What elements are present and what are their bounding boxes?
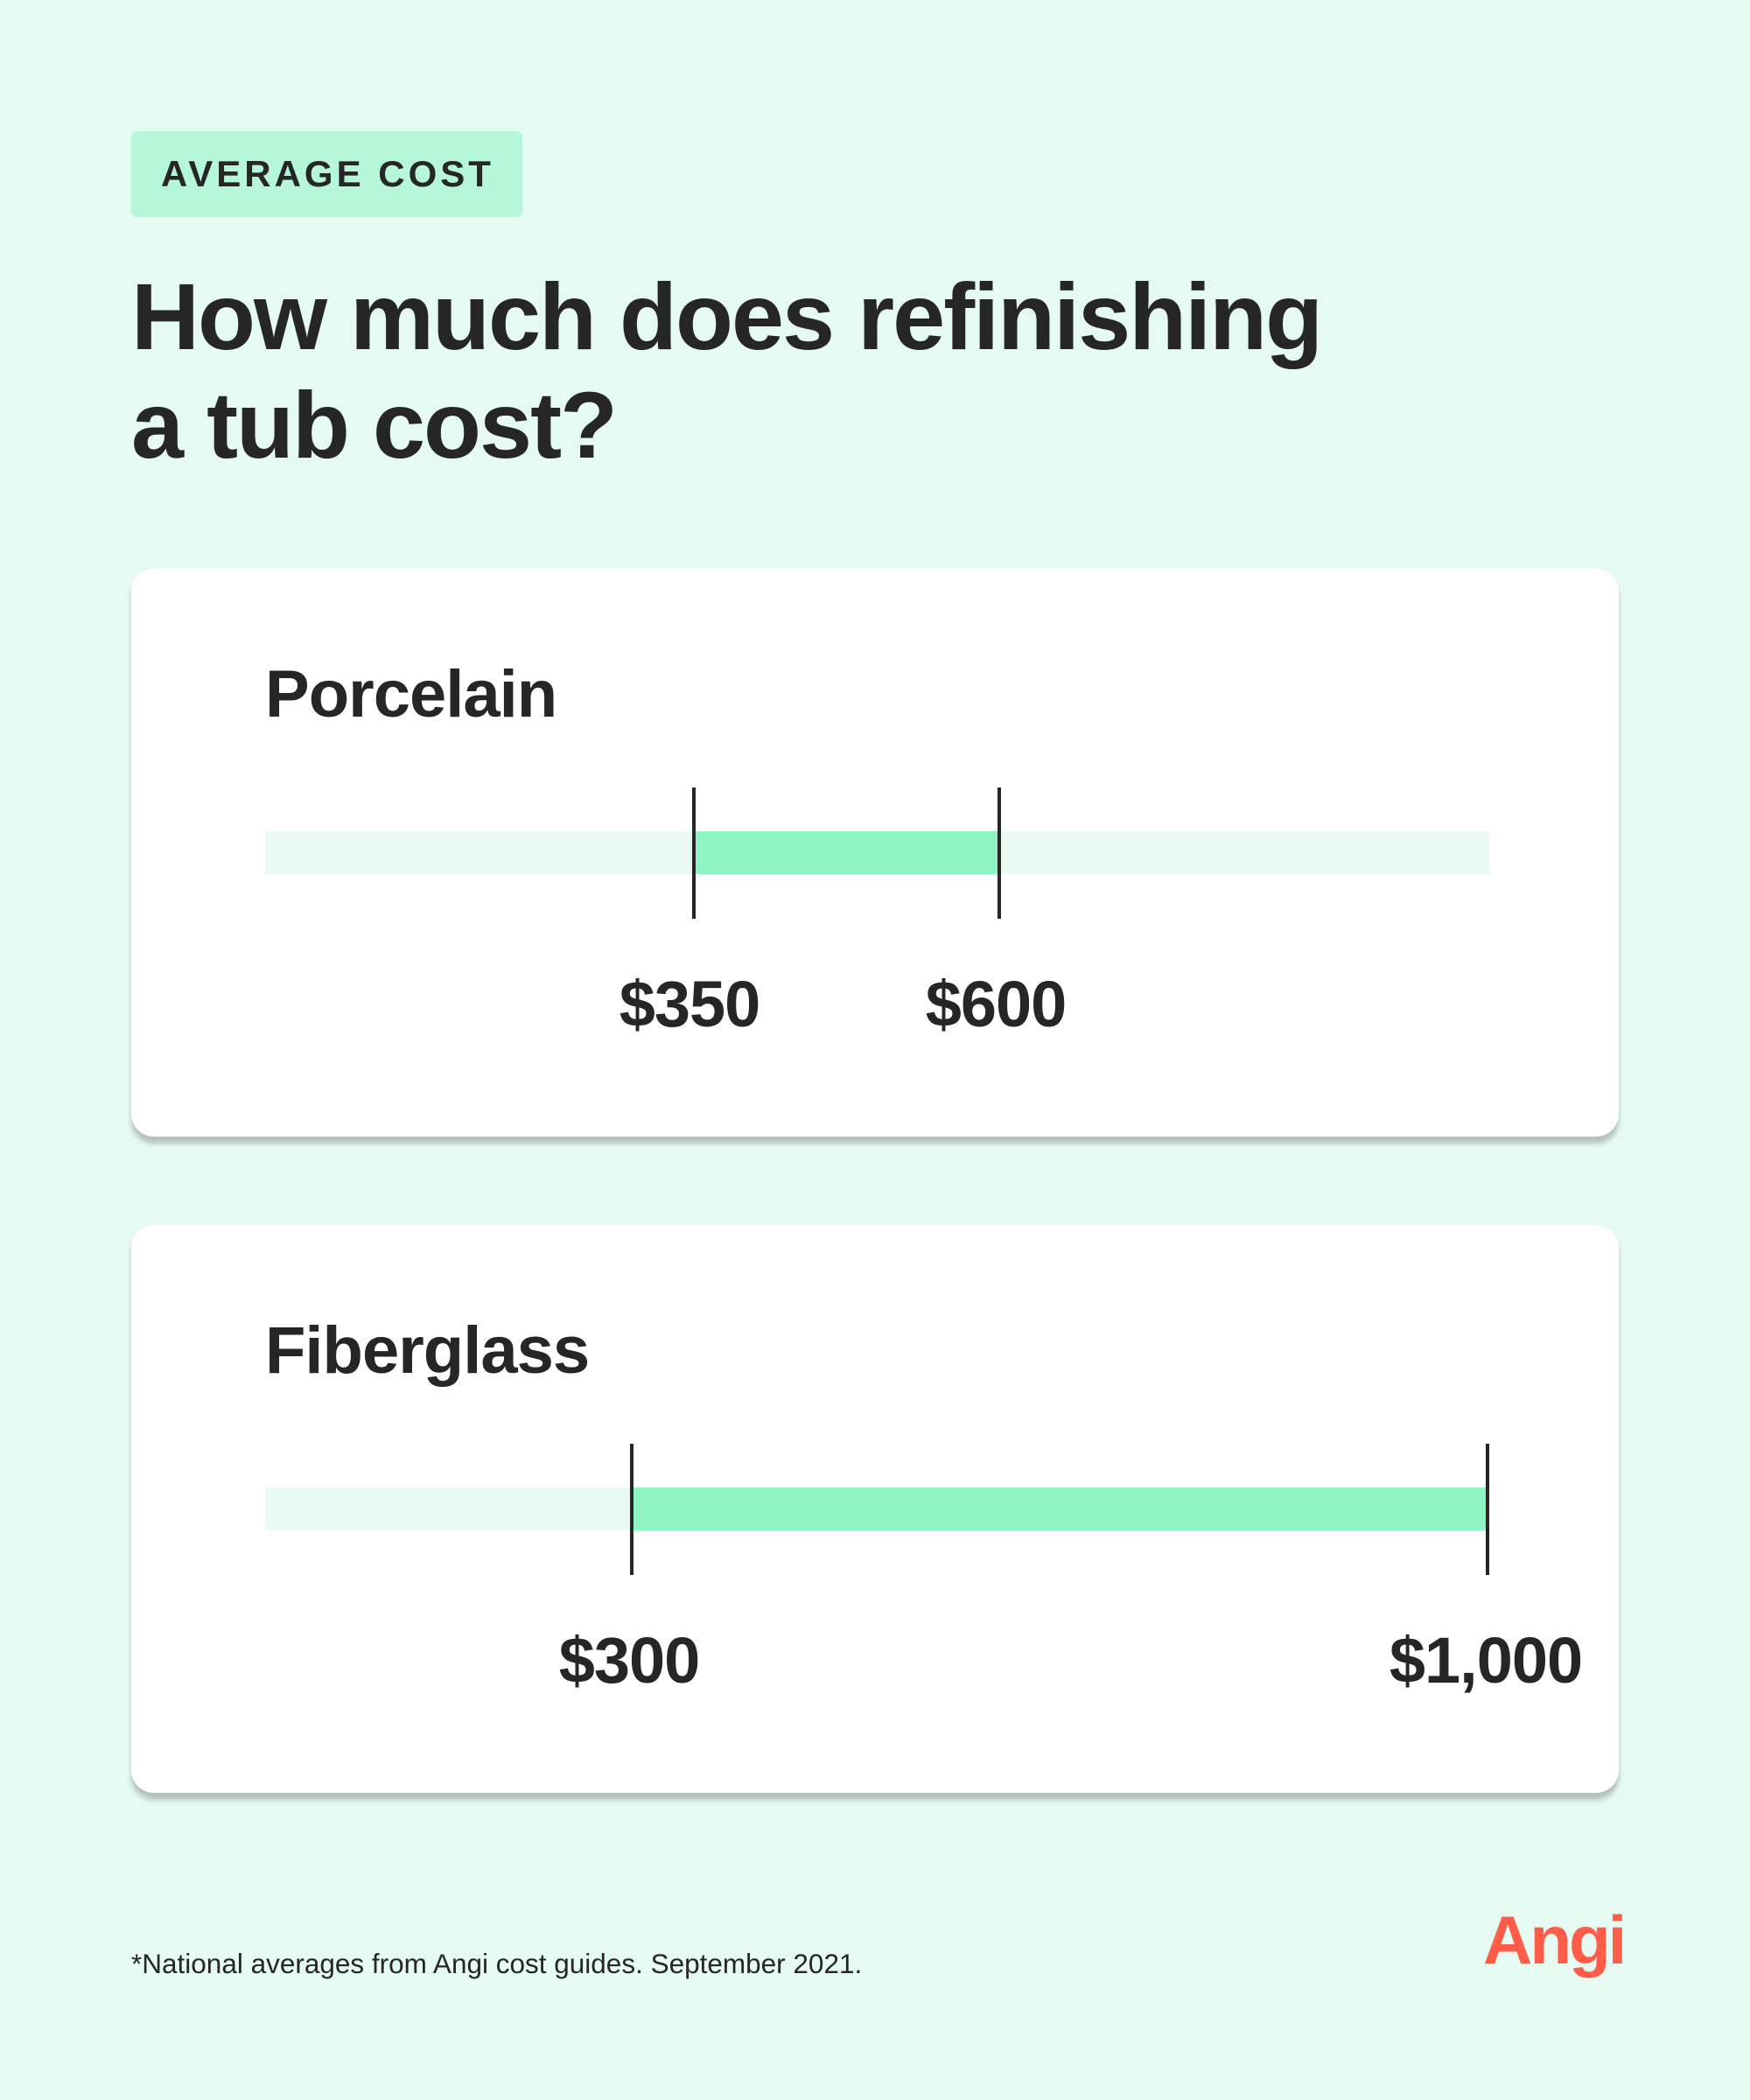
panel: porcelain bbox=[131, 569, 1619, 1137]
range bar: porcelain bbox=[265, 788, 1489, 919]
title: a tub cost? bbox=[131, 372, 616, 478]
label: $350: $350 bbox=[620, 968, 760, 1040]
logo: Angi: Angi bbox=[1483, 1901, 1624, 1978]
label: $300: $300 bbox=[559, 1624, 699, 1697]
label: $600: $600 bbox=[926, 968, 1066, 1040]
tag: average cost: AVERAGE COST bbox=[161, 153, 494, 194]
title bbox=[131, 263, 1321, 478]
panel: fiberglass bbox=[131, 1225, 1619, 1793]
tag: average cost bbox=[131, 131, 522, 217]
footnote: *National averages from Angi cost guides. September 2021. bbox=[131, 1948, 862, 1979]
range bar: fiberglass bbox=[265, 1444, 1489, 1575]
title: How much does refinishing bbox=[131, 263, 1321, 369]
heading: porcelain: Porcelain bbox=[265, 657, 556, 732]
label: $1,000: $1,000 bbox=[1390, 1624, 1582, 1697]
heading: fiberglass: Fiberglass bbox=[265, 1313, 589, 1388]
